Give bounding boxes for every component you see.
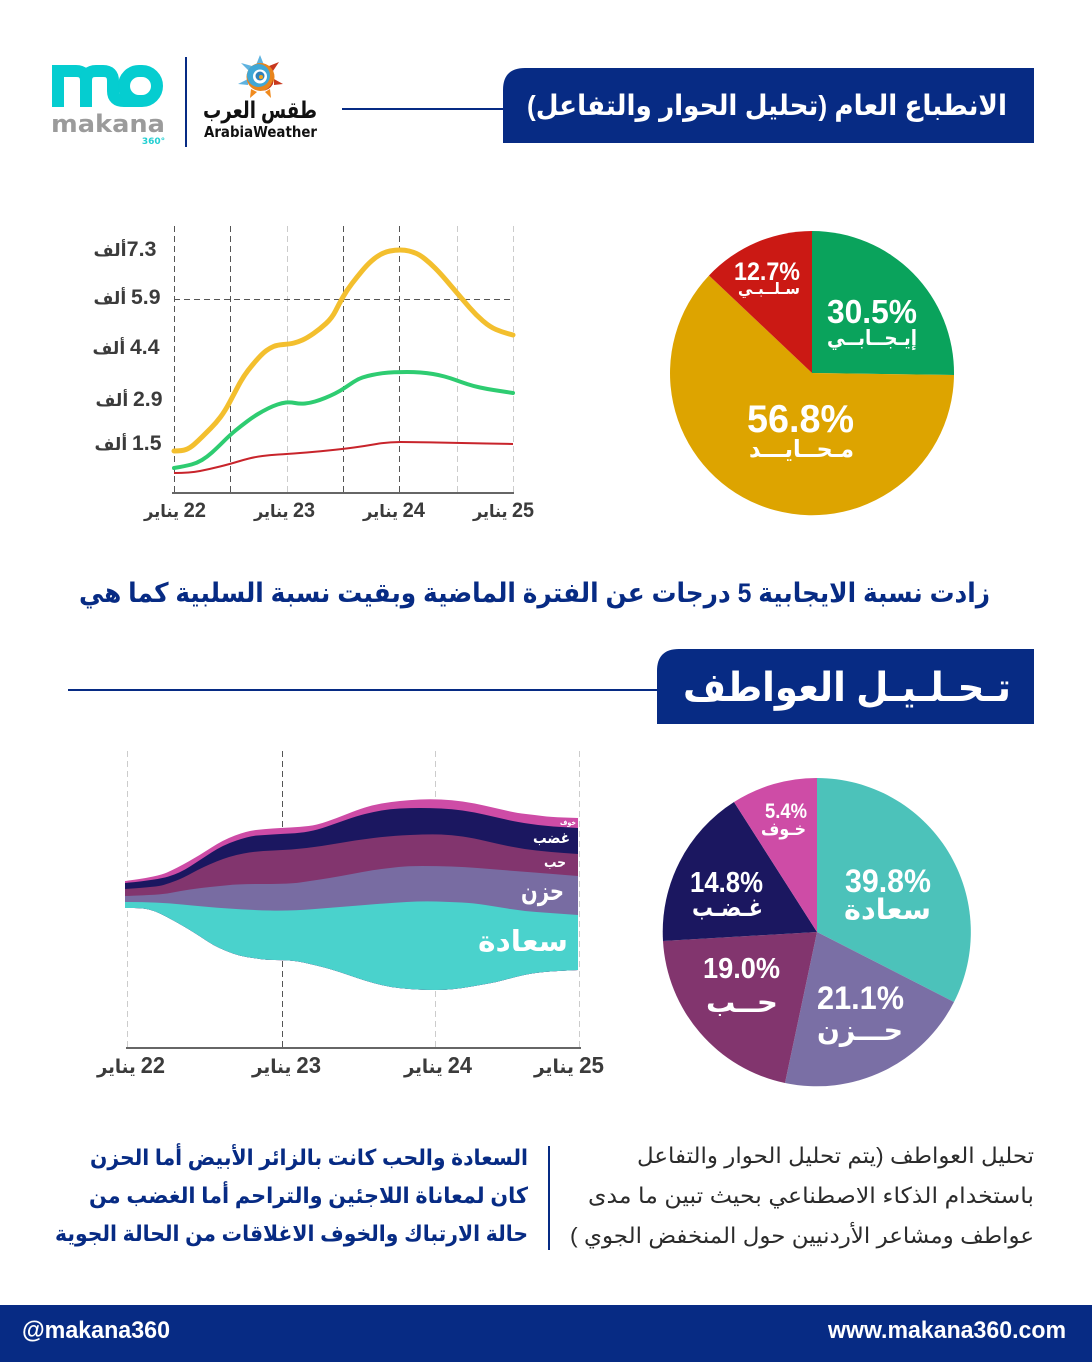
text block: findings: السعادة والحب كانت بالزائر الأبيض أما الحزن <box>90 1142 528 1171</box>
stream labels: سعادة <box>478 926 568 958</box>
logo: makana: makana <box>51 110 165 138</box>
footer bar: @makana360 <box>22 1317 170 1344</box>
green line: positive <box>174 372 513 468</box>
heading: emotion analysis: تـحـلـيـل العواطف <box>683 666 1011 711</box>
label: love: حــب <box>706 987 778 1018</box>
label: happiness: سعادة <box>844 894 931 925</box>
icon: sun <box>238 55 283 98</box>
text block: findings: كان لمعاناة اللاجئين والتراحم أما الغضب من <box>89 1180 528 1209</box>
x axis labels: 23 يناير <box>253 499 315 522</box>
label: love <box>703 953 780 1018</box>
y axis labels: 7.3ألف <box>93 238 156 261</box>
label: happiness: 39.8% <box>845 863 931 899</box>
footer bar <box>0 1305 1092 1362</box>
stream: fear <box>120 790 585 995</box>
label: anger: غـضـب <box>692 894 763 922</box>
label: neutral: 56.8% <box>747 398 854 441</box>
summary sentence: زادت نسبة الايجابية 5 درجات عن الفترة الماضية وبقيت نسبة السلبية كما هي <box>79 578 990 609</box>
label: negative: سـلــبـي <box>738 281 800 299</box>
y axis labels: 5.9 ألف <box>93 286 160 309</box>
divider: text blocks <box>548 1146 550 1250</box>
label: neutral <box>747 398 854 463</box>
label: positive: إيـجــابــي <box>827 327 917 350</box>
x axis labels: 23 يناير <box>251 1052 321 1078</box>
label: negative: 12.7% <box>734 258 800 286</box>
text block: findings <box>55 1142 528 1247</box>
logo: makana: 360° <box>142 137 165 147</box>
x axis labels: 24 يناير <box>362 499 425 522</box>
text block: findings: حالة الارتباك والخوف الاغلاقات من الحالة الجوية <box>55 1221 528 1247</box>
x axis labels: 22 يناير <box>143 499 206 522</box>
label: sadness: حـــزن <box>817 1015 903 1047</box>
y axis labels: 1.5 ألف <box>94 432 162 455</box>
y axis labels <box>92 238 162 455</box>
label: fear: 5.4% <box>765 800 807 823</box>
red line: negative <box>174 442 513 473</box>
text block: method description: تحليل العواطف (يتم تحليل الحوار والتفاعل <box>637 1143 1034 1169</box>
logo: makana <box>51 71 165 147</box>
label: anger <box>690 867 763 922</box>
connector line: title 1 <box>342 108 504 110</box>
x axis labels: 25 يناير <box>472 499 534 522</box>
connector line: title 2 <box>68 689 658 691</box>
logo divider <box>185 57 187 147</box>
label: fear: خـوف <box>761 819 806 840</box>
y axis labels: 4.4 ألف <box>92 336 160 359</box>
pie chart: sentiment <box>670 231 954 515</box>
stream: anger <box>125 808 578 995</box>
heading: emotion analysis <box>657 649 1034 724</box>
stream labels: خوف <box>560 818 576 827</box>
text block: method description: باستخدام الذكاء الاصطناعي بحيث تبين ما مدى <box>588 1183 1034 1209</box>
logo: ArabiaWeather: ArabiaWeather <box>204 123 318 141</box>
stream labels: حزن <box>521 876 564 907</box>
footer bar: www.makana360.com <box>827 1317 1066 1344</box>
stream chart: emotions over time <box>96 751 604 1078</box>
label: negative <box>734 258 800 299</box>
label: happiness <box>844 863 931 925</box>
label: fear <box>761 800 807 840</box>
x axis labels: 22 يناير <box>96 1052 165 1078</box>
label: sadness <box>817 980 904 1047</box>
logo: ArabiaWeather: طقس العرب <box>203 97 317 124</box>
stream labels <box>478 818 576 958</box>
label: neutral: مـحــايـــد <box>749 436 854 463</box>
heading: general impression: الانطباع العام (تحليل الحوار والتفاعل) <box>527 90 1007 122</box>
stream labels: غضب <box>533 830 570 847</box>
yellow line: neutral <box>174 250 513 451</box>
text block: method description <box>570 1143 1034 1249</box>
pie chart: emotions <box>663 778 971 1086</box>
x axis labels <box>96 1052 604 1078</box>
stream: sadness <box>125 866 578 995</box>
label: love: 19.0% <box>703 953 780 985</box>
heading: general impression <box>503 68 1034 143</box>
stream: happiness <box>125 901 578 995</box>
x axis labels <box>143 499 534 522</box>
line chart: interactions over time <box>92 226 534 522</box>
y axis labels: 2.9 ألف <box>95 388 162 411</box>
label: sadness: 21.1% <box>817 980 904 1016</box>
x axis labels: 25 يناير <box>533 1052 604 1078</box>
label: anger: 14.8% <box>690 867 763 899</box>
stream: love <box>125 834 578 995</box>
label: positive: 30.5% <box>827 293 917 330</box>
x axis labels: 24 يناير <box>403 1052 472 1078</box>
logo: ArabiaWeather <box>203 55 318 141</box>
text block: method description: عواطف ومشاعر الأردنيين حول المنخفض الجوي ) <box>570 1222 1034 1249</box>
stream labels: حب <box>544 854 566 870</box>
label: positive <box>827 293 917 350</box>
